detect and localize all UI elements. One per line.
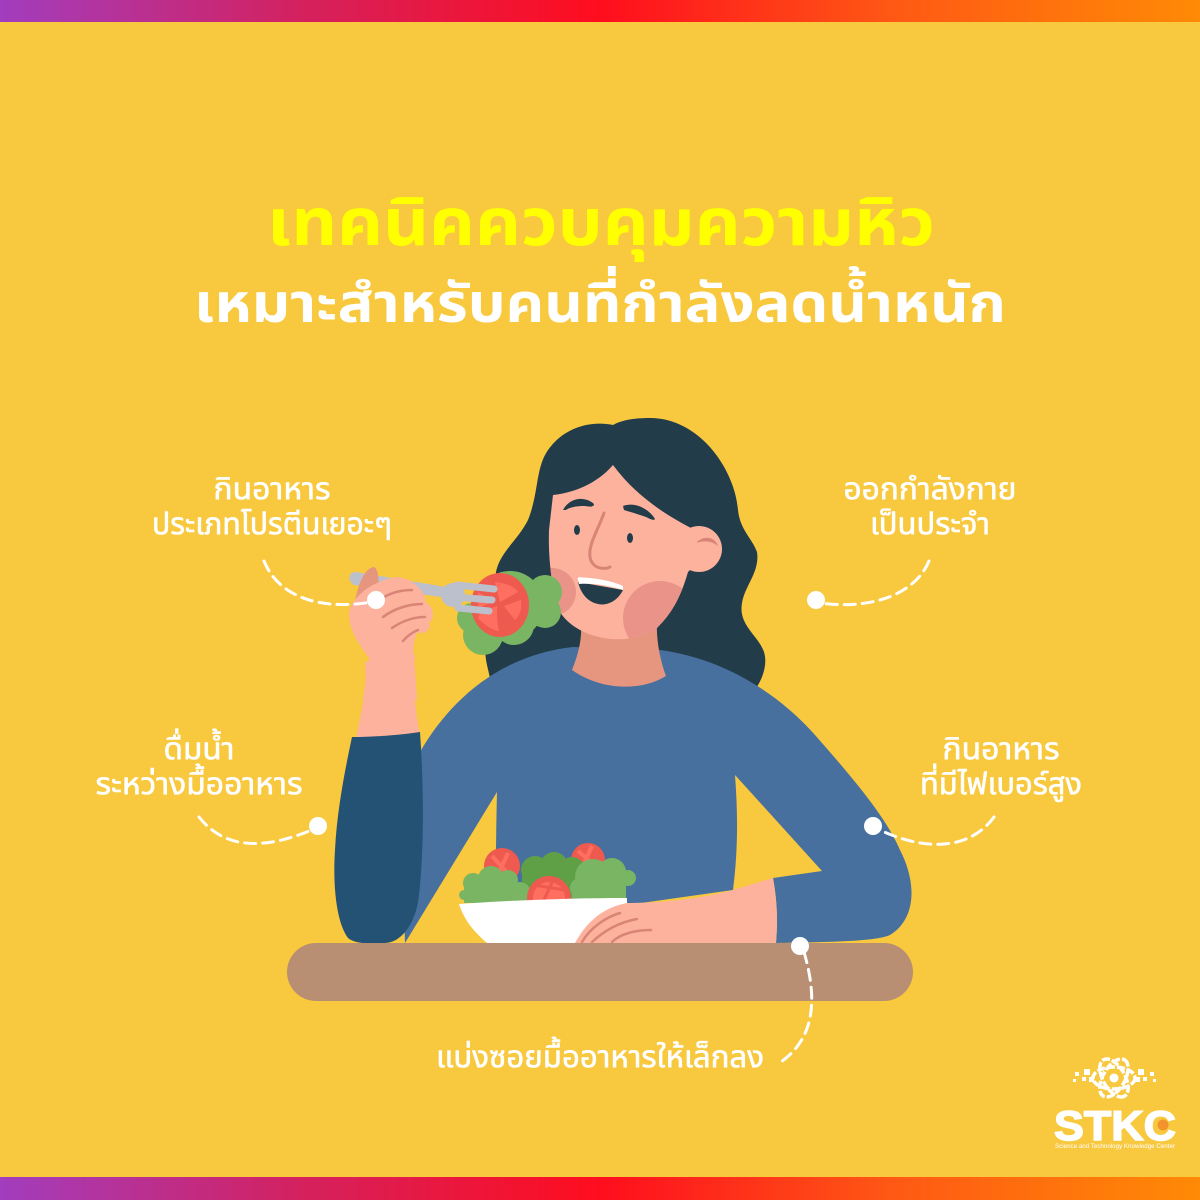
cheeks bbox=[550, 568, 682, 638]
top gradient bar bbox=[0, 0, 1200, 22]
mouth bbox=[578, 577, 623, 604]
callout: protein food: กินอาหาร bbox=[214, 473, 330, 506]
bowl bbox=[459, 898, 627, 943]
fork bbox=[349, 572, 494, 611]
callout: fiber bbox=[864, 733, 1082, 844]
logo pixel dots bbox=[1073, 1069, 1156, 1082]
bottom gradient bar bbox=[0, 1177, 1200, 1200]
callout: drink water: ระหว่างมื้ออาหาร bbox=[96, 763, 302, 801]
left sleeve bbox=[334, 732, 423, 943]
callout: fiber: กินอาหาร bbox=[942, 733, 1060, 766]
shirt bbox=[400, 647, 911, 943]
title: เหมาะสำหรับคนที่กำลังลดน้ำหนัก bbox=[194, 266, 1006, 334]
eyebrows bbox=[563, 499, 655, 520]
hand bbox=[349, 567, 433, 700]
callout: fiber: ที่มีไฟเบอร์สูง bbox=[920, 763, 1082, 802]
salad in bowl bbox=[459, 843, 636, 903]
logo tagline: Science and Technology Knowledge Center bbox=[1055, 1144, 1175, 1150]
face bbox=[548, 465, 697, 640]
callout: smaller meals bbox=[436, 937, 812, 1074]
callout: exercise: ออกกำลังกาย bbox=[844, 473, 1016, 506]
resting hand and forearm bbox=[575, 878, 777, 943]
logo wordmark: STKC bbox=[1054, 1102, 1176, 1149]
table bbox=[287, 943, 913, 1001]
raised arm bbox=[356, 655, 420, 740]
callout: drink water: ดื่มน้ำ bbox=[164, 728, 234, 766]
callout: protein food bbox=[152, 473, 392, 609]
title: เทคนิคควบคุมความหิว bbox=[267, 185, 935, 262]
illustration: woman eating salad bbox=[287, 418, 913, 1001]
neck bbox=[572, 620, 666, 687]
title bbox=[194, 185, 1006, 334]
nose bbox=[590, 513, 610, 568]
eyes bbox=[574, 525, 633, 543]
callout: drink water bbox=[96, 728, 327, 844]
logo orange dot bbox=[1158, 1120, 1168, 1130]
callout: exercise: เป็นประจำ bbox=[870, 508, 990, 541]
logo atom icon bbox=[1093, 1054, 1135, 1102]
hair bbox=[485, 418, 765, 700]
ear bbox=[676, 526, 722, 572]
callout: smaller meals: แบ่งซอยมื้ออาหารให้เล็กลง bbox=[436, 1036, 764, 1074]
callout: protein food: ประเภทโปรตีนเยอะๆ bbox=[152, 508, 392, 541]
callout: exercise bbox=[807, 473, 1016, 609]
fork salad bite bbox=[457, 571, 562, 655]
logo: STKC bbox=[1054, 1054, 1176, 1150]
